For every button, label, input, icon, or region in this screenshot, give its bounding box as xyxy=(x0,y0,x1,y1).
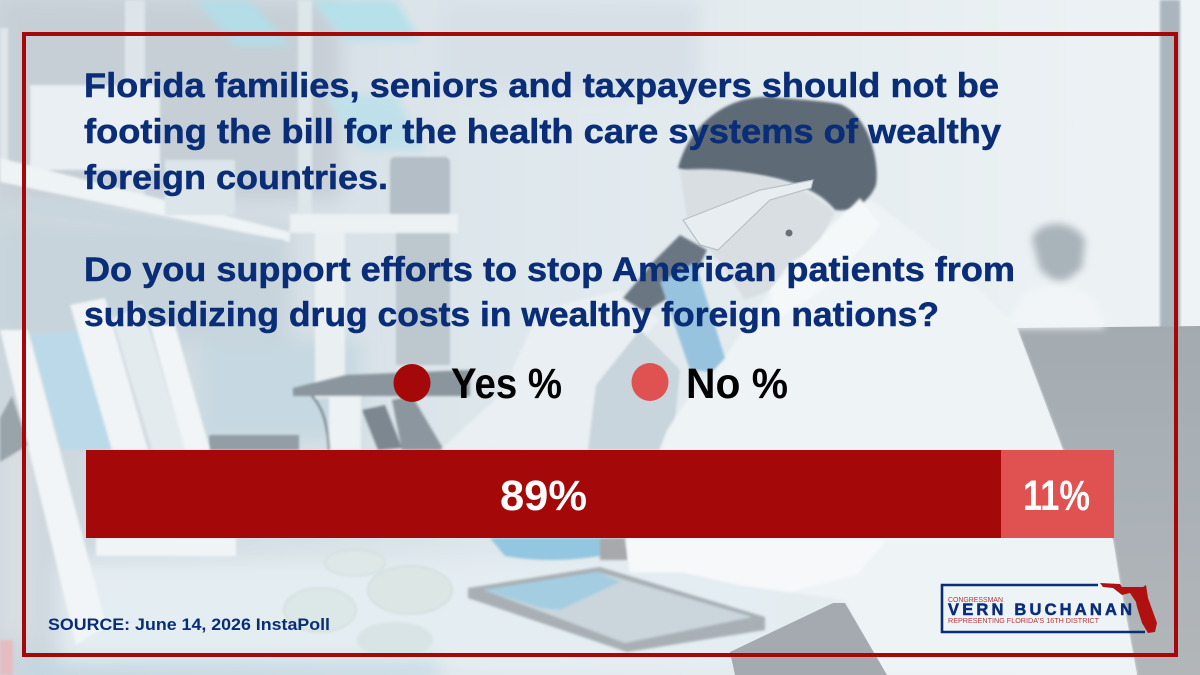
stacked bar chart xyxy=(86,450,1114,538)
logo: Congressman Vern Buchanan: VERN BUCHANAN xyxy=(948,601,1132,619)
source note: SOURCE: June 14, 2026 InstaPoll xyxy=(48,615,330,634)
seat xyxy=(730,603,887,675)
bar segment: no 11% xyxy=(1001,450,1114,538)
ceiling lights xyxy=(195,0,425,150)
bench items: box, glove, petri dishes xyxy=(0,538,1200,675)
face xyxy=(680,169,835,300)
legend xyxy=(394,360,788,408)
lab coat xyxy=(625,195,1137,675)
question text: Do you support efforts to stop American patients from xyxy=(84,251,1015,289)
background colleague xyxy=(1003,224,1105,328)
shelf with glassware xyxy=(0,0,312,248)
background microscope xyxy=(209,157,470,450)
question text xyxy=(84,251,1015,334)
legend item: yes xyxy=(394,360,562,408)
legend item: yes: Yes % xyxy=(451,360,562,408)
statement text xyxy=(84,67,1001,197)
logo: Congressman Vern Buchanan: CONGRESSMAN xyxy=(948,595,1003,604)
bar segment: yes 89%: 89% xyxy=(500,472,587,520)
bar segment: no 11%: 11% xyxy=(1023,472,1090,520)
tablet xyxy=(468,567,765,652)
statement text: foreign countries. xyxy=(84,159,388,197)
collar xyxy=(770,198,880,320)
logo: Congressman Vern Buchanan: REPRESENTING FLORIDA'S 16TH DISTRICT xyxy=(948,616,1099,625)
legend item: no xyxy=(632,360,788,408)
logo: Congressman Vern Buchanan xyxy=(942,583,1157,633)
pipettes xyxy=(0,298,210,645)
main microscope body xyxy=(440,290,680,450)
blue glove xyxy=(660,262,725,372)
question text: subsidizing drug costs in wealthy foreign nations? xyxy=(84,296,939,334)
statement text: footing the bill for the health care systems of wealthy xyxy=(84,113,1001,151)
scientist xyxy=(623,97,1137,675)
bar segment: yes 89% xyxy=(86,450,1001,538)
dark chair and window post xyxy=(1017,0,1200,675)
legend item: no: No % xyxy=(686,360,788,408)
eyepiece xyxy=(623,235,707,312)
hair xyxy=(678,97,877,210)
statement text: Florida families, seniors and taxpayers should not be xyxy=(84,67,999,105)
icon: Florida map xyxy=(1100,583,1157,633)
goggles xyxy=(683,180,813,250)
